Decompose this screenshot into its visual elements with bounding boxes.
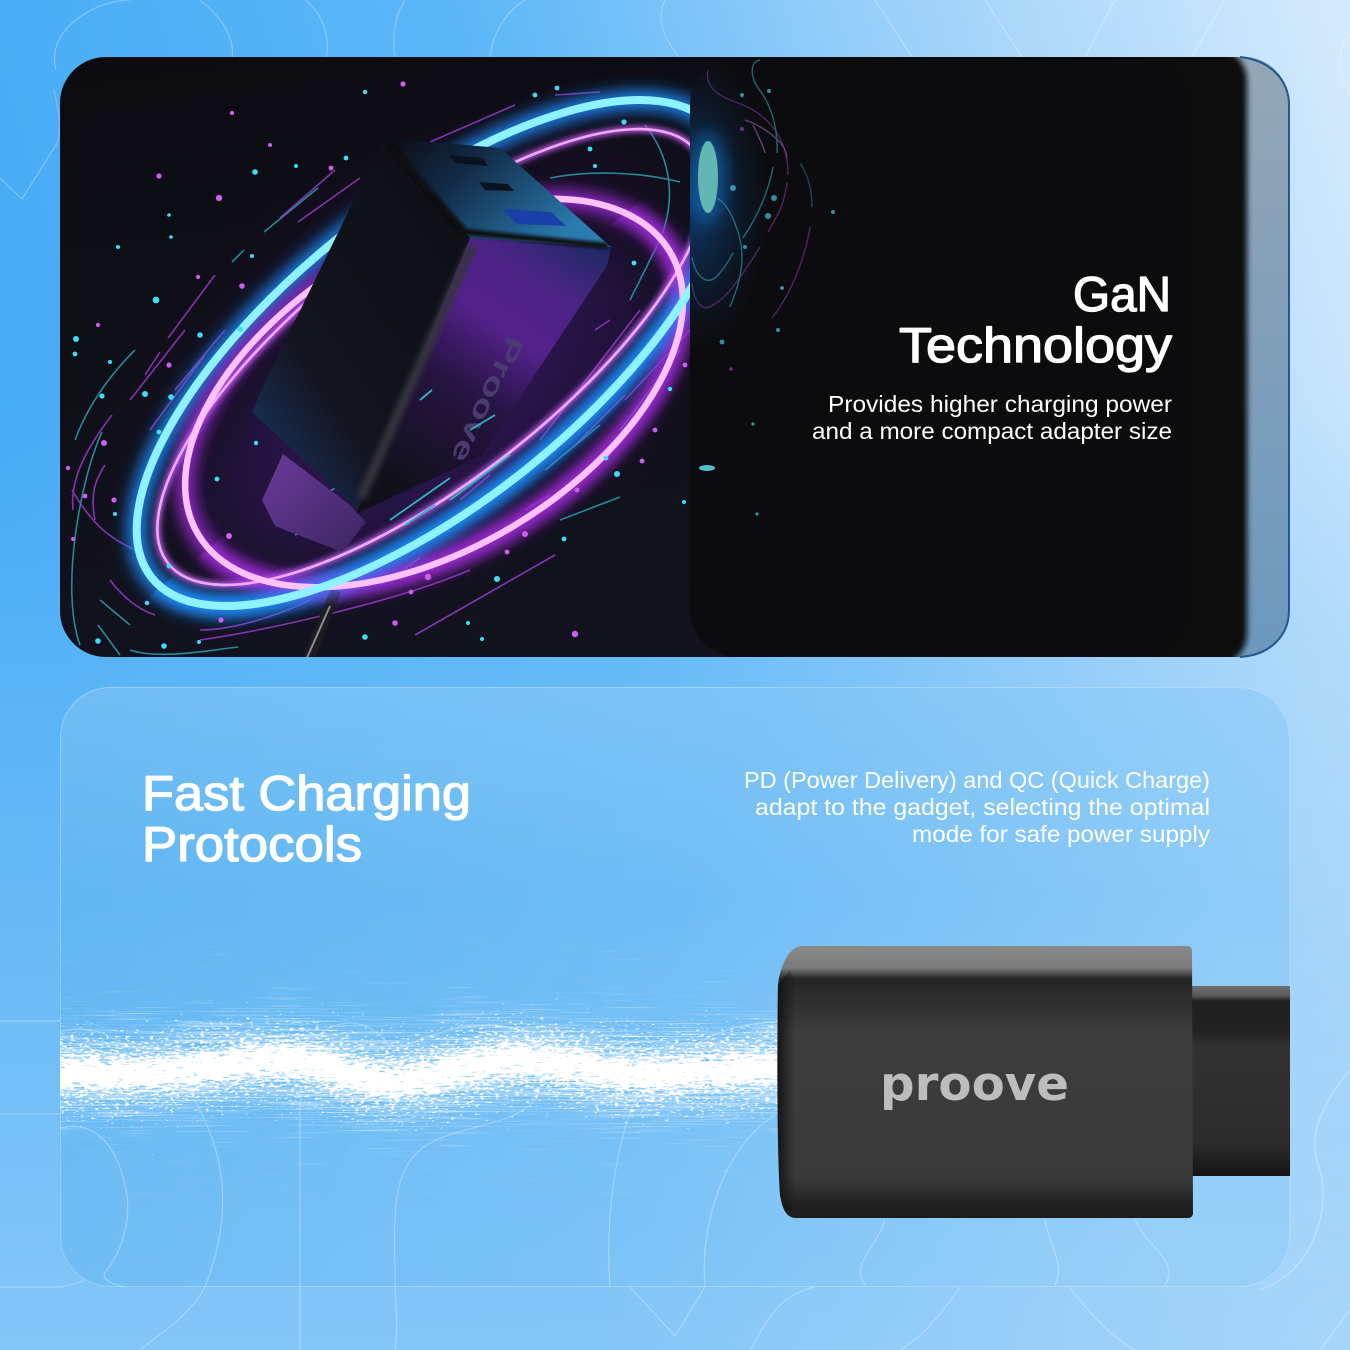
ghost ring glow through glass xyxy=(690,59,835,516)
chart: neon rings in front of charger xyxy=(146,200,690,626)
chart: neon rings behind charger xyxy=(114,78,694,628)
icon: wall charger product xyxy=(254,139,611,660)
panel: dark text card xyxy=(690,57,1252,657)
heading: GaN Technology: GaN xyxy=(1073,268,1171,322)
text: protocols description xyxy=(744,767,1210,847)
usb-a port xyxy=(502,209,566,226)
brand logo: proove xyxy=(880,1057,1069,1112)
heading: Fast Charging Protocols: Fast Charging xyxy=(142,767,471,821)
chart: magenta particles xyxy=(66,81,687,637)
charger prongs xyxy=(262,454,366,552)
chart: energy stream xyxy=(0,1059,880,1083)
panel: GaN technology card xyxy=(60,56,1290,658)
text: protocols description: PD (Power Delivery) and QC (Quick Charge) xyxy=(744,767,1210,793)
text: GaN description: Provides higher charging power xyxy=(828,391,1172,417)
charger cable xyxy=(306,590,336,660)
charger left face xyxy=(254,142,470,508)
charger edges xyxy=(390,146,608,246)
usb-c port 1 xyxy=(449,155,488,166)
usb-c port 2 xyxy=(479,182,514,191)
heading: Fast Charging Protocols: Protocols xyxy=(142,818,362,872)
card edge glass xyxy=(60,57,1288,657)
icon: charger side view xyxy=(777,946,1290,1218)
rotated brand text on charger: Proove xyxy=(445,331,530,467)
heading: GaN Technology: Technology xyxy=(899,319,1173,373)
charger left edge shade xyxy=(777,970,795,1210)
text: GaN description xyxy=(812,391,1172,444)
charger top face xyxy=(384,139,611,247)
text: protocols description: adapt to the gadget, selecting the optimal xyxy=(755,794,1210,820)
heading: GaN Technology xyxy=(899,268,1173,373)
decorative outlines inside card xyxy=(60,1022,1169,1287)
chart: rear dust trails xyxy=(72,92,690,655)
panel: fast charging card xyxy=(0,687,1290,1287)
chart: cyan particles xyxy=(73,86,686,649)
charger neck xyxy=(1190,986,1290,1176)
text: protocols description: mode for safe power supply xyxy=(912,821,1210,847)
text: GaN description: and a more compact adapter size xyxy=(812,418,1172,444)
charger right face xyxy=(356,238,611,514)
heading: Fast Charging Protocols xyxy=(142,767,471,872)
charger body xyxy=(777,946,1193,1218)
card outer edge xyxy=(1240,57,1289,657)
